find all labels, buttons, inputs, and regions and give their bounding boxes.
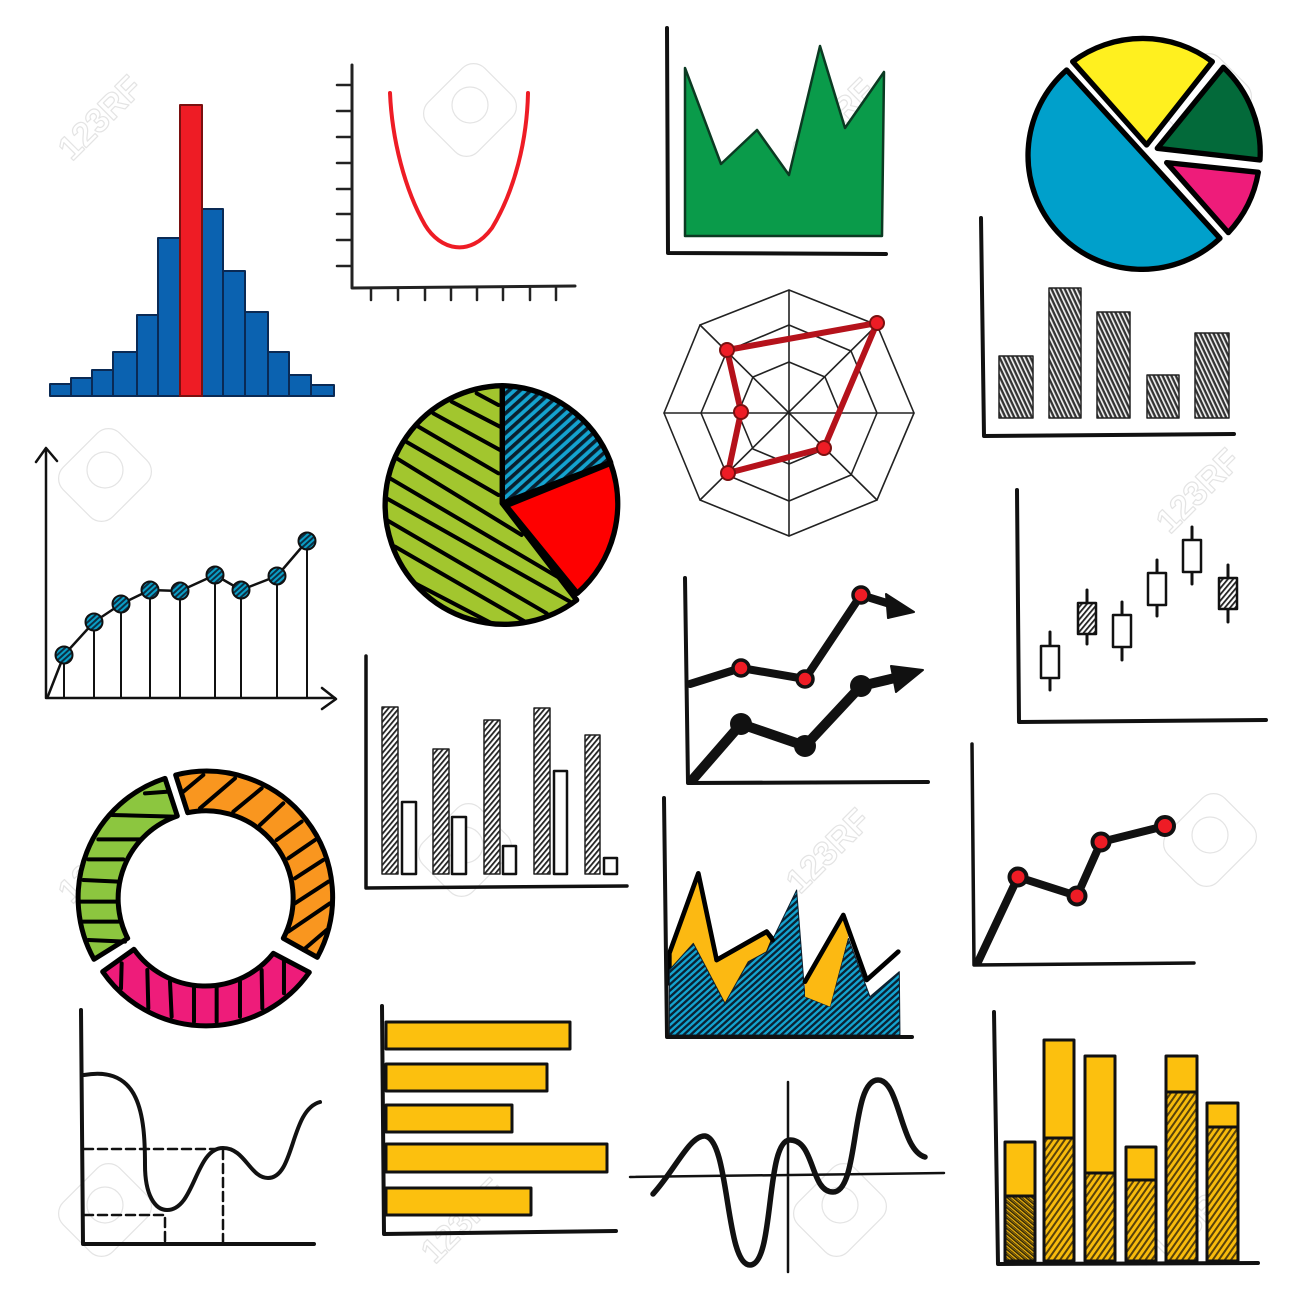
wavy curve with dashed guides (81, 1010, 320, 1244)
hatched pie chart (385, 386, 618, 624)
double line trend chart with arrows (685, 578, 928, 783)
two-layer area chart (664, 798, 912, 1037)
watermarks: 123RF (51, 812, 150, 911)
watermarks: 123RF (414, 1172, 513, 1271)
watermarks: 123RF (1149, 442, 1248, 541)
red slice (506, 463, 618, 593)
red bar (180, 105, 202, 396)
watermarks: 123RF (784, 72, 883, 171)
dark green slice (1157, 67, 1260, 160)
horizontal bar chart (382, 1006, 616, 1234)
four point line chart (972, 744, 1194, 965)
red curve (390, 93, 528, 247)
histogram bell chart (50, 105, 334, 396)
watermarks: 123RF (51, 69, 150, 168)
blue slice (1028, 70, 1220, 269)
yellow slice (1073, 38, 1212, 145)
hatched bar chart (981, 218, 1234, 436)
exploded pie chart (1028, 38, 1260, 269)
watermarks: 123RF (779, 802, 878, 901)
oscillating wave chart (630, 1080, 944, 1272)
blue slice (502, 386, 611, 503)
dotted line stem chart (36, 448, 336, 709)
yellow area (669, 873, 773, 1007)
pink segment (103, 949, 309, 1026)
blue hatched area (669, 890, 900, 1035)
second yellow peak (805, 917, 848, 1007)
watermarks: 123RF (1144, 1172, 1243, 1271)
parabola line chart (337, 65, 575, 300)
green area chart (667, 28, 886, 254)
segmented donut chart (78, 771, 333, 1026)
green slice (385, 386, 577, 624)
grouped bar chart (366, 656, 627, 888)
pink slice (1167, 163, 1258, 233)
orange segment (176, 771, 333, 957)
green segment (78, 778, 177, 959)
stacked yellow bar chart (994, 1012, 1258, 1264)
candlestick chart (1017, 490, 1266, 722)
radar chart (664, 290, 914, 536)
